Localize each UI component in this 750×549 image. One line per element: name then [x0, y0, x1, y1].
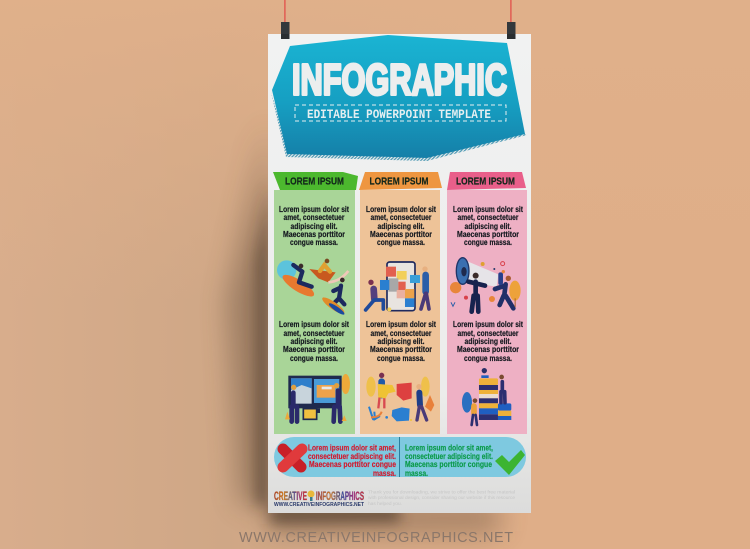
illustration: phone puzzle	[366, 262, 429, 311]
pink text block 2: Lorem ipsum dolor sit	[453, 319, 523, 329]
footer note: has helped you.	[368, 501, 402, 507]
orange text block 1: Lorem ipsum dolor sit	[366, 204, 436, 214]
pink text block 2	[453, 319, 523, 363]
negative text: Maecenas porttitor congue	[309, 459, 396, 469]
orange text block 2: congue massa.	[377, 353, 425, 363]
pink text block 1: congue massa.	[464, 237, 512, 247]
pink text block 2: amet, consectetuer	[458, 328, 519, 338]
orange text block 1: amet, consectetuer	[370, 212, 432, 222]
orange text block 1: Maecenas porttitor	[370, 229, 433, 239]
green text block 2: amet, consectetuer	[284, 328, 345, 338]
negative text: consectetuer adipiscing elit.	[308, 451, 396, 461]
dashed subtitle frame	[295, 105, 506, 121]
positive text: Maecenas porttitor congue	[405, 459, 492, 469]
positive text: consectetuer adipiscing elit.	[405, 451, 493, 461]
illustration: surfers	[277, 259, 348, 316]
illustration: stacked blocks	[462, 368, 511, 425]
positive text: massa.	[405, 468, 428, 478]
orange text block 2: amet, consectetuer	[370, 328, 432, 338]
orange text block 2	[366, 319, 436, 363]
green tab heading	[273, 172, 358, 190]
green tab heading: LOREM IPSUM	[285, 176, 344, 188]
negative text: Lorem ipsum dolor sit amet,	[308, 442, 396, 452]
green text block 1	[279, 204, 349, 247]
green text block 2: Lorem ipsum dolor sit	[279, 319, 349, 329]
title: INFOGRAPHIC	[292, 56, 507, 104]
pink text block 1	[453, 204, 523, 247]
green text block 2: congue massa.	[290, 353, 338, 363]
footer note: with professional design, consider sharing our website if this resource	[368, 495, 515, 501]
green text block 1: adipiscing elit.	[290, 221, 338, 231]
poster sheet	[268, 34, 531, 513]
footer logo: CREATIVE	[274, 491, 307, 503]
footer logo	[274, 490, 364, 508]
pink text block 2: Maecenas porttitor	[457, 344, 520, 354]
green text block 2	[279, 319, 349, 363]
hanging strings and clips	[281, 0, 516, 39]
green text block 2: adipiscing elit.	[290, 336, 338, 346]
pink text block 1: Lorem ipsum dolor sit	[453, 204, 523, 214]
header banner	[271, 35, 527, 161]
orange text block 2: adipiscing elit.	[378, 336, 424, 346]
subtitle: EDITABLE POWERPOINT TEMPLATE	[307, 107, 491, 122]
pink tab heading	[447, 172, 526, 190]
website caption: WWW.CREATIVEINFOGRAPHICS.NET	[239, 530, 513, 546]
orange text block 1: adipiscing elit.	[378, 221, 424, 231]
pink tab heading: LOREM IPSUM	[456, 176, 515, 188]
green text block 1: amet, consectetuer	[284, 212, 345, 222]
panel: orange column	[359, 172, 442, 434]
negative text: massa.	[373, 468, 396, 478]
green text block 1: Lorem ipsum dolor sit	[279, 204, 349, 214]
footer note	[368, 490, 515, 507]
panel: do and don't pill	[274, 437, 526, 478]
pink text block 2: adipiscing elit.	[464, 336, 512, 346]
illustration: joining puzzle pieces	[366, 373, 434, 421]
icon: red cross	[283, 449, 302, 467]
panel: green column	[273, 172, 358, 434]
orange tab heading	[359, 172, 442, 190]
pink text block 1: Maecenas porttitor	[457, 229, 520, 239]
negative text	[308, 442, 396, 478]
pink text block 2: congue massa.	[464, 353, 512, 363]
panel: pink column	[447, 172, 527, 434]
pink text block 1: adipiscing elit.	[464, 221, 512, 231]
footer logo: INFOGRAPHICS	[316, 491, 364, 503]
clip fronts	[281, 34, 516, 39]
orange text block 1: congue massa.	[377, 237, 425, 247]
green text block 1: Maecenas porttitor	[283, 229, 346, 239]
poster shadow	[228, 120, 500, 532]
green text block 2: Maecenas porttitor	[283, 344, 346, 354]
footer note: Thank you for downloading, we strive to offer the best free material	[368, 490, 515, 496]
positive text: Lorem ipsum dolor sit amet,	[405, 442, 493, 452]
footer logo: WWW.CREATIVEINFOGRAPHICS.NET	[274, 502, 364, 508]
orange tab heading: LOREM IPSUM	[370, 176, 429, 188]
orange text block 2: Lorem ipsum dolor sit	[366, 319, 436, 329]
illustration: megaphone team	[450, 258, 521, 312]
icon: green check	[495, 450, 525, 475]
positive text	[405, 442, 493, 478]
pink text block 1: amet, consectetuer	[458, 212, 519, 222]
illustration: monitor	[285, 374, 350, 422]
green text block 1: congue massa.	[290, 237, 338, 247]
orange text block 1	[366, 204, 436, 247]
orange text block 2: Maecenas porttitor	[370, 344, 433, 354]
